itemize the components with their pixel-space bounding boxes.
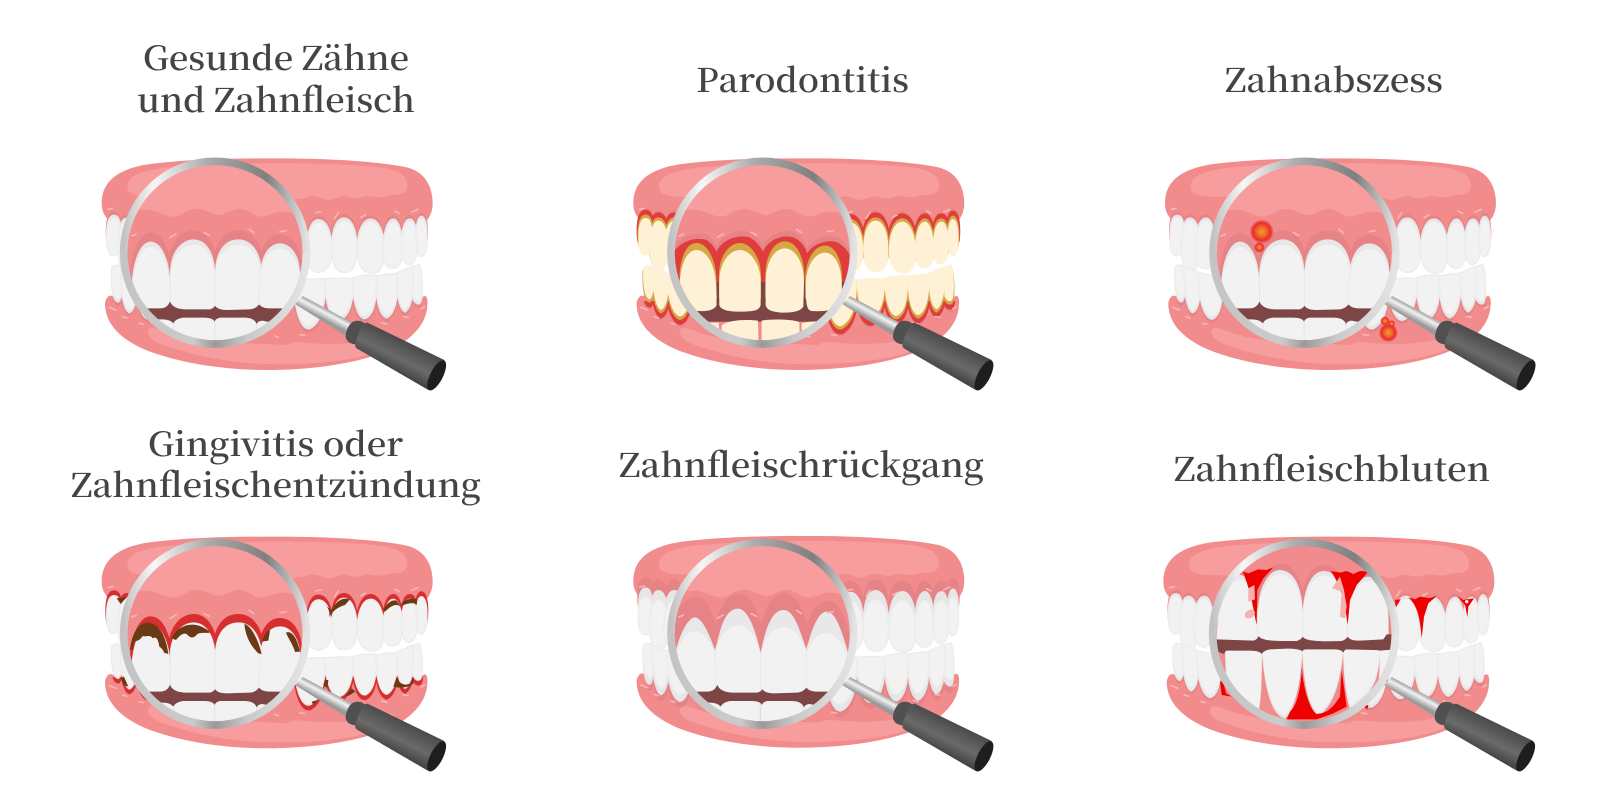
title: Parodontitis: Parodontitis	[696, 55, 909, 102]
panel: Parodontitis	[633, 55, 997, 393]
title: Gesunde Zähne und Zahnfleisch: Gesunde Zähne	[143, 33, 409, 80]
icon: magnifying glass over healthy teeth	[123, 160, 450, 393]
panel: Zahnfleischbluten	[1163, 444, 1539, 774]
panel: Zahnabszess	[1165, 55, 1539, 393]
icon: magnifying glass over periodontitis	[671, 160, 997, 393]
icon: magnifying glass over bleeding gums	[1212, 541, 1539, 774]
panel: Gingivitis oder Zahnfleischentzündung	[71, 419, 481, 774]
illustration: mouth with receding gums	[633, 536, 964, 748]
illustration: mouth with periodontitis	[633, 158, 964, 370]
icon: magnifying glass over gingivitis	[123, 541, 450, 774]
title: Gingivitis oder Zahnfleischentzündung: Gingivitis oder	[148, 419, 403, 466]
icon: magnifying glass over abscess	[1213, 160, 1539, 393]
illustration: mouth with abscess	[1165, 158, 1496, 370]
panel: Gesunde Zähne und Zahnfleisch	[102, 33, 450, 393]
title: Gesunde Zähne und Zahnfleisch	[137, 33, 415, 122]
title: Zahnabszess: Zahnabszess	[1225, 55, 1443, 102]
title: Gingivitis oder Zahnfleischentzündung	[71, 419, 481, 507]
panel: Zahnfleischrückgang	[619, 440, 997, 774]
title: Zahnfleischrückgang: Zahnfleischrückgang	[619, 440, 984, 487]
title: Zahnfleischbluten: Zahnfleischbluten	[1174, 444, 1490, 491]
icon: magnifying glass over receding gums	[671, 541, 997, 774]
title: Gesunde Zähne und Zahnfleisch: und Zahnfleisch	[137, 75, 415, 122]
illustration: healthy mouth	[102, 158, 433, 370]
title: Gingivitis oder Zahnfleischentzündung: Zahnfleischentzündung	[71, 460, 481, 507]
illustration: mouth with bleeding gums	[1163, 537, 1494, 748]
illustration: mouth with gingivitis	[102, 537, 433, 748]
